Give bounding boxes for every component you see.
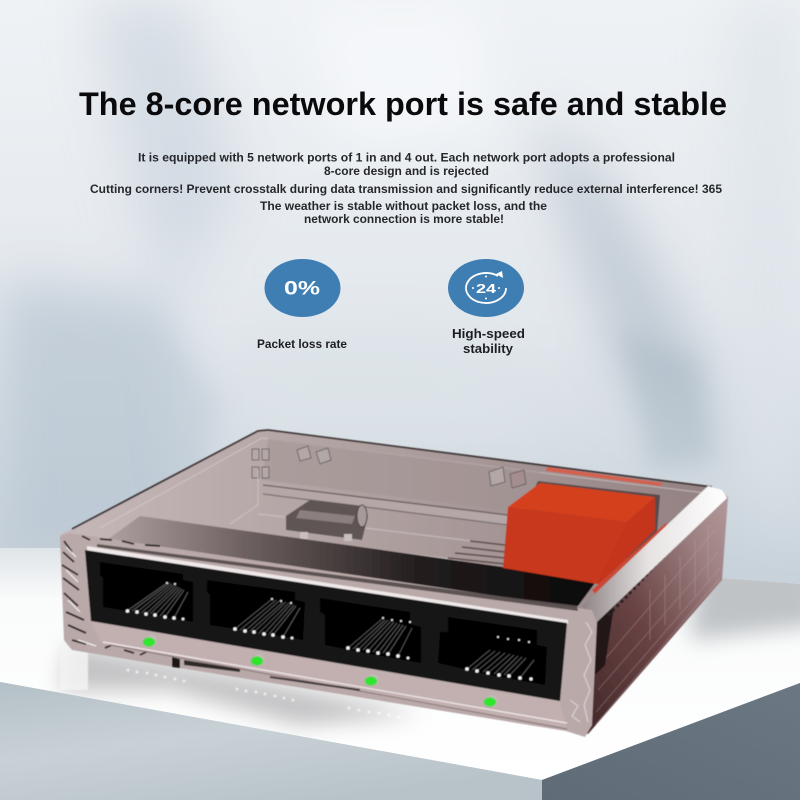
- internal connectors cluster: [252, 446, 526, 488]
- red connector block: [503, 483, 655, 584]
- icon: 24h stability badge: [448, 259, 524, 317]
- frame left light strokes: [66, 547, 96, 646]
- front frame left ornament marks: [62, 536, 160, 655]
- description text block: 8-core design and is rejected: [324, 166, 489, 178]
- icon: 24h stability badge: 24: [476, 281, 497, 296]
- internal shading strip at the back: [262, 438, 540, 510]
- icon: 0% packet loss badge: 0%: [284, 278, 320, 300]
- title: The 8-core network port is safe and stable: [79, 86, 727, 122]
- internal floor lines: [230, 470, 505, 560]
- label: high-speed stability: stability: [463, 341, 514, 356]
- description text block: [90, 152, 723, 226]
- red sliver along rod: [592, 522, 667, 598]
- rear orange strip: [546, 467, 663, 486]
- port 1: [100, 562, 193, 622]
- port 3: [320, 598, 421, 663]
- top plate dark rim: [72, 430, 712, 529]
- front frame: [60, 533, 597, 737]
- shelf: white block with two side faces: [0, 548, 800, 800]
- lower slot: [172, 657, 180, 668]
- icon: 0% packet loss badge: [264, 259, 340, 317]
- reflection dots on shelf: [127, 669, 400, 718]
- lower slot bar: [184, 660, 240, 672]
- transparent top plate: [60, 430, 712, 612]
- network switch device: [60, 430, 728, 737]
- LED strip below ports: [91, 622, 566, 728]
- description text block: The weather is stable without packet loss, and the: [260, 201, 547, 213]
- light bar above ports: [87, 546, 568, 624]
- internal USB connector: [286, 500, 368, 541]
- frame right ornament: [570, 622, 592, 722]
- internal PCB chip: [448, 541, 505, 564]
- description text block: network connection is more stable!: [304, 214, 504, 226]
- green LED indicators: [143, 638, 496, 706]
- inner rim highlight: [100, 438, 705, 528]
- upper dark slit above bar: [97, 544, 578, 611]
- lower long slot: [270, 676, 360, 691]
- port 2: [207, 580, 305, 640]
- port 4: [438, 617, 547, 685]
- label: high-speed stability: High-speed: [452, 326, 525, 341]
- description text block: It is equipped with 5 network ports of 1 in and 4 out. Each network port adopts a professional: [138, 152, 675, 164]
- internal long rail: [263, 485, 508, 525]
- strip edge lines: [103, 642, 567, 729]
- label: packet loss rate: Packet loss rate: [257, 337, 347, 351]
- white corner rod: [582, 486, 727, 622]
- dark gradient band along front: [97, 516, 595, 606]
- right side transparent panel: [578, 488, 728, 734]
- LED ring shadows: [146, 636, 498, 706]
- description text block: Cutting corners! Prevent crosstalk during data transmission and significantly reduce external interference! 365: [90, 184, 723, 196]
- label: high-speed stability: [452, 326, 525, 356]
- side panel circuit lines: [596, 525, 720, 724]
- dark box behind red connector: [520, 481, 660, 575]
- serrated dark marks along rod: [608, 502, 716, 615]
- black port panel: [85, 550, 567, 701]
- black bar inside side panel: [595, 600, 615, 675]
